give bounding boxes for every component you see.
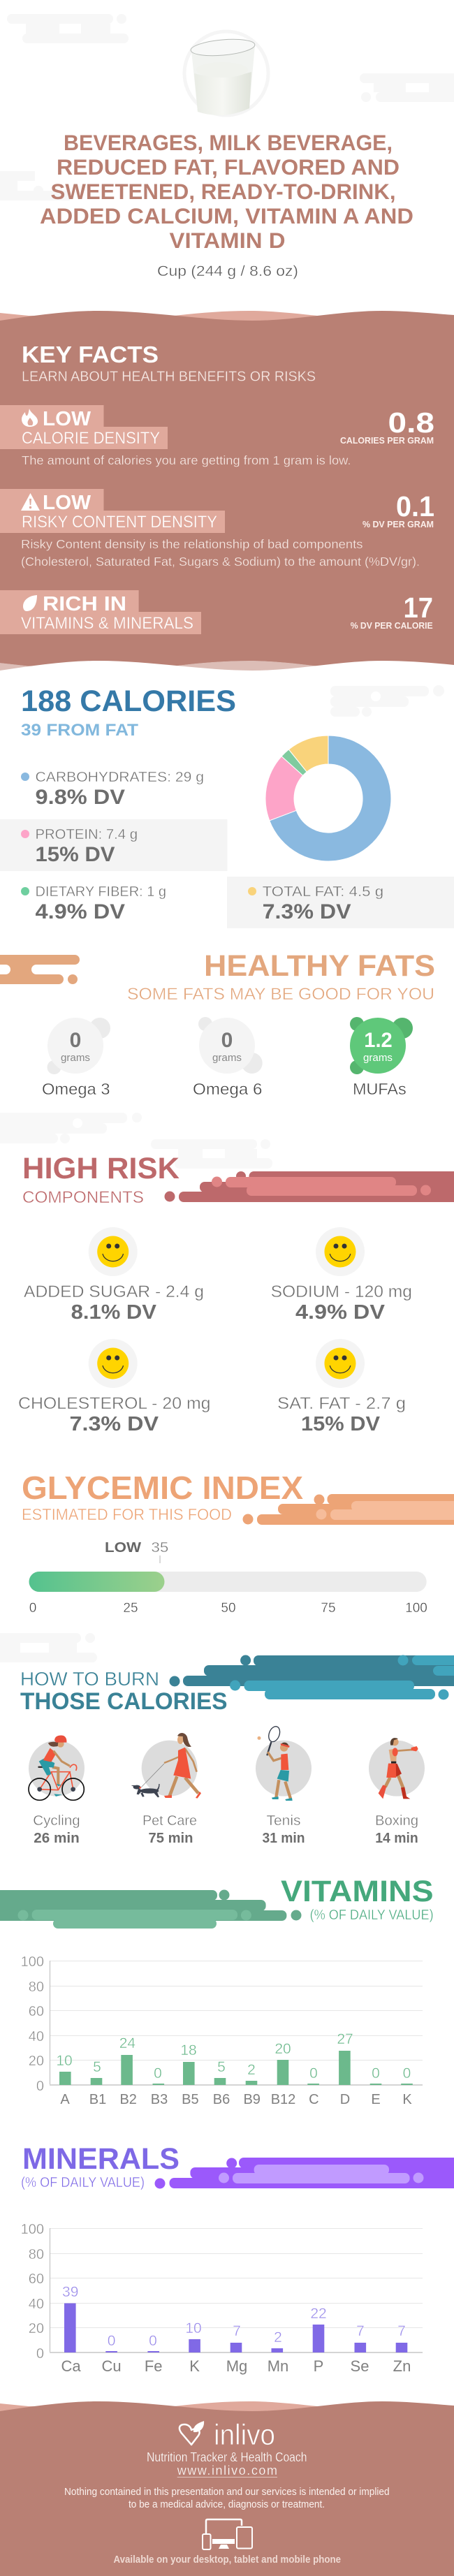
activity: cycling: 26 min (34, 1831, 80, 1846)
risk item: cholesterol: 7.3% DV (70, 1413, 159, 1435)
fact: calorie density: CALORIES PER GRAM (340, 435, 434, 446)
title: ADDED CALCIUM, VITAMIN A AND (40, 203, 413, 228)
risk item: added sugar: ADDED SUGAR - 2.4 g (24, 1282, 204, 1301)
bar chart: minerals: P (314, 2357, 323, 2375)
bar chart: minerals: 39 (62, 2284, 78, 2300)
risk item: cholesterol (18, 1339, 211, 1435)
panel: vitamins (0, 1875, 434, 2107)
bar chart: vitamins: 60 (29, 2004, 44, 2019)
heading: minerals (21, 2142, 180, 2190)
gauge scale: 75 (321, 1601, 336, 1616)
bar chart: vitamins: 2 (247, 2062, 256, 2078)
gauge scale: 50 (221, 1601, 236, 1616)
icon: devices (203, 2519, 252, 2549)
icon: flame (22, 409, 38, 427)
activity: boxing: 14 min (375, 1831, 418, 1846)
fat item: MUFAs (350, 1017, 413, 1098)
activity: tennis: Tenis (267, 1813, 300, 1829)
bar chart: minerals: 22 (310, 2306, 327, 2322)
bar chart: vitamins: D (340, 2092, 350, 2107)
risk item: saturated fat: SAT. FAT - 2.7 g (277, 1394, 406, 1413)
stat: dietary fiber: 4.9% DV (35, 900, 125, 923)
panel: footer (0, 2401, 454, 2576)
fat item: MUFAs: grams (363, 1052, 393, 1064)
bar chart: vitamins: 24 (119, 2035, 136, 2051)
heading: key facts (22, 342, 316, 384)
activity: cycling: Cycling (33, 1813, 80, 1829)
indicator: low 35: LOW (105, 1539, 142, 1556)
fact: risky content density: LOW (43, 492, 91, 514)
risk item: added sugar: 8.1% DV (71, 1301, 157, 1324)
fat item: MUFAs: MUFAs (353, 1080, 407, 1098)
stat: total fat (227, 877, 454, 928)
heading: high risk: HIGH RISK (22, 1152, 180, 1185)
fact: rich in vitamins and minerals: % DV PER CALORIE (351, 620, 433, 631)
heading: how to burn those calories (20, 1668, 228, 1715)
heading: calories: 188 CALORIES (21, 685, 236, 718)
gauge: glycemic index bar (29, 1572, 427, 1592)
stat: total fat: TOTAL FAT: 4.5 g (263, 884, 383, 900)
disclaimer: Nothing contained in this presentation and our services is intended or implied (64, 2487, 390, 2498)
icon: cyclist (29, 1736, 85, 1800)
bar chart: vitamins: B3 (151, 2092, 168, 2107)
bar chart: vitamins (21, 1954, 423, 2107)
bar chart: vitamins: A (60, 2092, 70, 2107)
activity: pet care (131, 1733, 201, 1846)
heading: high risk (22, 1152, 180, 1207)
panel: minerals (21, 2142, 454, 2375)
bar chart: vitamins: 5 (93, 2059, 101, 2075)
icon: smiley (89, 1339, 138, 1388)
risk item: cholesterol: CHOLESTEROL - 20 mg (18, 1394, 211, 1413)
bar chart: vitamins: 100 (21, 1954, 44, 1970)
heading: key facts: LEARN ABOUT HEALTH BENEFITS OR RISKS (22, 369, 316, 384)
title (40, 130, 413, 253)
bar chart: vitamins: 0 (154, 2065, 162, 2081)
icon: boxer (369, 1738, 425, 1799)
fat item: omega 6 (193, 1017, 263, 1098)
fact: calorie density (0, 405, 434, 467)
fat item: omega 3: Omega 3 (42, 1080, 110, 1098)
bar chart: minerals: Se (351, 2357, 369, 2375)
fact: risky content density (0, 489, 434, 569)
fact: rich in vitamins and minerals: VITAMINS & MINERALS (21, 614, 193, 633)
heading: vitamins (281, 1875, 434, 1923)
website link: www.inlivo.com (177, 2464, 277, 2478)
activity: boxing: Boxing (375, 1813, 418, 1829)
risk item: sodium: SODIUM - 120 mg (271, 1282, 412, 1301)
bar chart: minerals: Fe (145, 2357, 163, 2375)
heading: high risk: COMPONENTS (22, 1188, 144, 1207)
heading: minerals: (% OF DAILY VALUE) (21, 2175, 145, 2190)
title: SWEETENED, READY-TO-DRINK, (50, 179, 395, 204)
bar chart: vitamins: C (309, 2092, 319, 2107)
decorative banner: minerals (155, 2158, 454, 2189)
stat: dietary fiber (21, 884, 166, 923)
panel: key facts (0, 311, 454, 681)
fact: calorie density: The amount of calories you are getting from 1 gram is low. (22, 453, 351, 467)
panel: glycemic index (22, 1470, 454, 1616)
title: VITAMIN D (169, 228, 285, 253)
stat: carbohydrates: 9.8% DV (35, 786, 125, 809)
bar chart: minerals: 0 (149, 2333, 157, 2349)
bar chart: minerals: 10 (185, 2320, 202, 2336)
decorative banner: glycemic index (243, 1494, 454, 1525)
heading: minerals: MINERALS (22, 2142, 180, 2176)
fact: risky content density: 0.1 (396, 490, 434, 522)
bar chart: minerals: 7 (397, 2323, 406, 2339)
disclaimer (64, 2487, 390, 2510)
bar chart: minerals: 0 (108, 2333, 115, 2349)
bar chart: vitamins: B2 (119, 2092, 137, 2107)
gauge scale: 25 (123, 1601, 138, 1616)
bar chart: minerals: Mg (226, 2357, 247, 2375)
fat item: omega 3 (42, 1018, 110, 1098)
decorative banner: healthy fats (0, 955, 80, 984)
bar chart: minerals: 7 (233, 2323, 241, 2339)
icon: leaf (23, 595, 37, 611)
bar chart: vitamins: 27 (337, 2031, 353, 2047)
fat item: omega 6: grams (212, 1052, 242, 1064)
icon: warning triangle (21, 493, 40, 511)
bar chart: vitamins: 20 (29, 2054, 44, 2069)
fact: calorie density: 0.8 (388, 407, 434, 439)
decorative banner: burn calories (169, 1655, 454, 1700)
bar chart: minerals: Mn (268, 2357, 288, 2375)
icon: woman walking dog (131, 1733, 201, 1799)
icon: smiley (316, 1227, 365, 1276)
stat: carbohydrates: CARBOHYDRATES: 29 g (35, 769, 204, 785)
fact: calorie density: LOW (43, 408, 91, 430)
bar chart: minerals (21, 2222, 423, 2375)
bar chart: minerals: 2 (274, 2329, 282, 2346)
gauge scale (29, 1601, 427, 1616)
bar chart: vitamins: B6 (213, 2092, 230, 2107)
heading: key facts: KEY FACTS (22, 342, 159, 368)
bar chart: vitamins: 10 (56, 2053, 73, 2069)
risk item: sodium (271, 1227, 412, 1324)
bar chart: vitamins: 20 (274, 2041, 291, 2057)
availability note: Available on your desktop, tablet and mobile phone (113, 2554, 341, 2566)
fact: rich in vitamins and minerals: 17 (404, 592, 433, 624)
bar chart: vitamins: 0 (309, 2065, 318, 2081)
bar chart: minerals: 20 (29, 2321, 44, 2336)
fact: risky content density: % DV PER GRAM (363, 519, 434, 529)
bar chart: minerals: Cu (102, 2357, 122, 2375)
bar chart: minerals: 60 (29, 2271, 44, 2287)
heading: healthy fats: SOME FATS MAY BE GOOD FOR YOU (127, 985, 434, 1004)
icon: smiley (89, 1227, 138, 1276)
bar chart: minerals: 40 (29, 2297, 44, 2312)
bar chart: vitamins: 80 (29, 1979, 44, 1995)
risk item: added sugar (24, 1227, 204, 1324)
stat: total fat: 7.3% DV (263, 900, 351, 923)
bar chart: vitamins: 5 (217, 2059, 226, 2075)
disclaimer: to be a medical advice, diagnosis or treatment. (129, 2499, 325, 2510)
gauge scale: 0 (29, 1601, 36, 1616)
donut chart: macronutrients (265, 736, 391, 861)
heading: how to burn those calories: HOW TO BURN (20, 1668, 159, 1690)
bar chart: vitamins: 0 (372, 2065, 380, 2081)
heading: calories (21, 685, 236, 740)
gauge scale: 100 (405, 1601, 427, 1616)
title: REDUCED FAT, FLAVORED AND (57, 154, 400, 180)
heading: how to burn those calories: THOSE CALORIES (20, 1688, 228, 1715)
bar chart: vitamins: E (371, 2092, 381, 2107)
heading: healthy fats (127, 949, 435, 1004)
tagline: Nutrition Tracker & Health Coach (147, 2450, 307, 2464)
icon: smiley (316, 1339, 365, 1388)
bar chart: vitamins: 18 (180, 2042, 197, 2058)
indicator: low 35 (105, 1539, 168, 1563)
bar chart: vitamins: 0 (403, 2065, 411, 2081)
stat: dietary fiber: DIETARY FIBER: 1 g (35, 884, 166, 900)
serving size: Cup (244 g / 8.6 oz) (157, 263, 298, 279)
risk item: saturated fat: 15% DV (301, 1413, 381, 1435)
fat item: MUFAs: 1.2 (364, 1029, 393, 1052)
bar chart: minerals: 0 (36, 2346, 44, 2362)
decorative banner: high risk (165, 1171, 454, 1202)
fact: risky content density: Risky Content density is the relationship of bad components (21, 537, 363, 551)
heading: calories: 39 FROM FAT (21, 721, 138, 740)
fat item: omega 6: Omega 6 (193, 1080, 263, 1098)
panel: healthy fats (0, 949, 435, 1098)
title: BEVERAGES, MILK BEVERAGE, (64, 130, 393, 155)
activity: pet care: 75 min (148, 1831, 193, 1846)
panel: how to burn calories (0, 1633, 454, 1846)
logo: inlivo: inlivo (214, 2418, 275, 2451)
risk item: sodium: 4.9% DV (295, 1301, 386, 1324)
bar chart: minerals: 100 (21, 2222, 44, 2237)
food image: glass of milk (184, 31, 268, 115)
heading: glycemic index (22, 1470, 303, 1523)
bar chart: vitamins: B12 (271, 2092, 295, 2107)
fat item: omega 3: grams (61, 1052, 90, 1064)
heading: vitamins: VITAMINS (281, 1875, 434, 1908)
bar chart: vitamins: B9 (243, 2092, 261, 2107)
bar chart: vitamins: B5 (182, 2092, 199, 2107)
bar chart: vitamins: 40 (29, 2029, 44, 2044)
logo: inlivo (180, 2418, 275, 2451)
fact: rich in vitamins and minerals (0, 590, 433, 634)
bar chart: vitamins: 0 (36, 2079, 44, 2094)
activity: pet care: Pet Care (142, 1813, 197, 1829)
activity: tennis: 31 min (263, 1831, 305, 1846)
activity: tennis (256, 1725, 312, 1846)
heading: vitamins: (% OF DAILY VALUE) (310, 1908, 434, 1923)
bar chart: vitamins: B1 (89, 2092, 106, 2107)
stat: protein: 15% DV (35, 843, 115, 866)
indicator: low 35: 35 (151, 1539, 168, 1556)
icon: tennis player (256, 1725, 312, 1801)
fact: risky content density: (Cholesterol, Saturated Fat, Sugars & Sodium) to the amount (%DV/gr). (21, 555, 420, 569)
fact: risky content density: RISKY CONTENT DENSITY (22, 513, 217, 532)
stat: protein: PROTEIN: 7.4 g (35, 826, 138, 842)
bar chart: minerals: Ca (61, 2357, 81, 2375)
bar chart: minerals: Zn (393, 2357, 411, 2375)
heading: glycemic index: GLYCEMIC INDEX (22, 1470, 303, 1506)
header (0, 14, 454, 279)
heading: glycemic index: ESTIMATED FOR THIS FOOD (22, 1505, 232, 1523)
fat item: omega 6: 0 (221, 1029, 233, 1052)
fat item: omega 3: 0 (70, 1029, 81, 1052)
heading: healthy fats: HEALTHY FATS (204, 949, 435, 983)
fact: rich in vitamins and minerals: RICH IN (43, 593, 126, 615)
bar chart: minerals: 7 (356, 2323, 365, 2339)
bar chart: minerals: K (189, 2357, 200, 2375)
fact: calorie density: CALORIE DENSITY (22, 429, 160, 448)
activity: cycling (29, 1736, 85, 1846)
panel: calories (0, 685, 454, 928)
stat: carbohydrates (21, 769, 204, 809)
bar chart: minerals: 80 (29, 2247, 44, 2262)
risk item: saturated fat (277, 1339, 406, 1435)
panel: high risk components (0, 1113, 454, 1435)
activity: boxing (369, 1738, 425, 1846)
decorative banner: vitamins (0, 1890, 302, 1929)
stat: protein (0, 819, 228, 871)
bar chart: vitamins: K (402, 2092, 412, 2107)
